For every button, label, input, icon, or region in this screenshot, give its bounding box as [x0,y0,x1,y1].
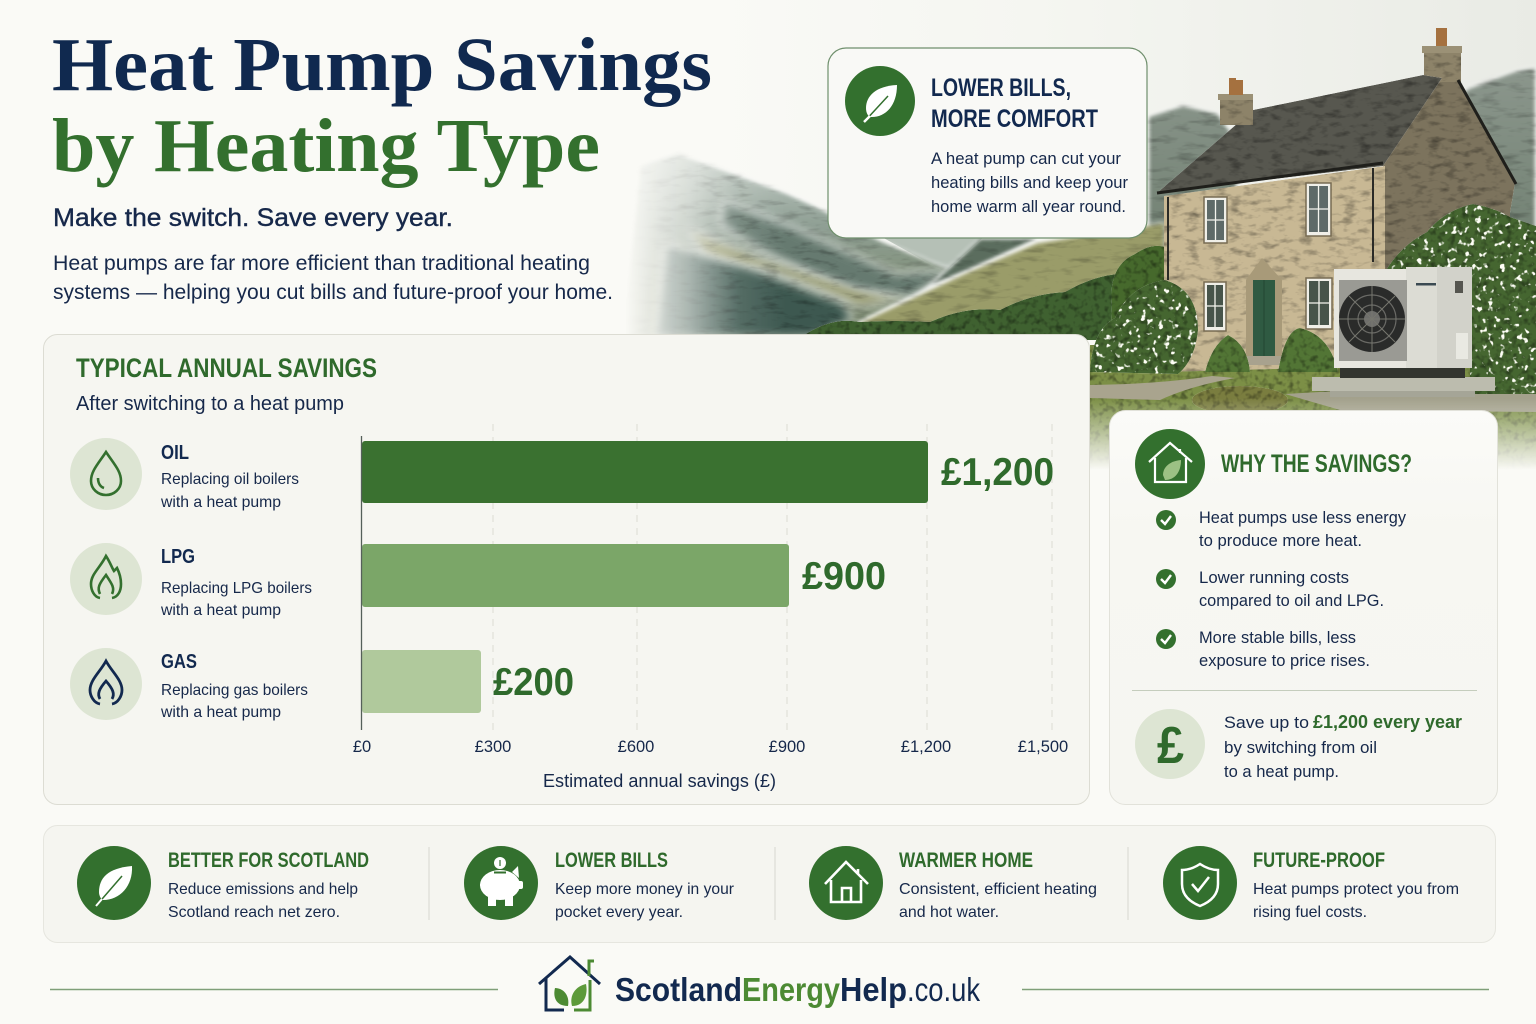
axis ticks: £900 [769,738,805,756]
intro paragraph: systems — helping you cut bills and future-proof your home. [53,280,613,304]
benefit: lower bills [464,846,735,921]
bar: gas [362,650,574,713]
footer logo [50,957,1489,1010]
row: oil: OIL [161,442,189,464]
benefit: warmer home: WARMER HOME [899,849,1033,872]
row: LPG: with a heat pump [160,602,281,619]
title line 2: by Heating Type [52,104,600,188]
axis ticks [353,738,1068,756]
right chimney [1422,28,1462,82]
gable wall [1383,78,1515,300]
door shrubs [1205,328,1338,372]
icon: house [809,846,883,920]
row: gas: GAS [161,651,197,673]
icon: shield [1163,846,1237,920]
reason 1 [1156,509,1407,550]
intro paragraph [53,251,613,304]
bar chart [353,424,1068,791]
callout heading: LOWER BILLS, [931,74,1071,102]
benefit: better for Scotland: Reduce emissions and help [168,881,358,898]
fan [1339,286,1405,352]
axis ticks: £1,500 [1018,738,1068,756]
mountain scenery [620,67,1536,340]
reason 2: compared to oil and LPG. [1199,592,1384,610]
casing [1334,269,1406,368]
scene: Scottish landscape with stone house and heat pump [620,0,1536,470]
right flowering bush [1385,204,1536,394]
bar: gas: £200 [493,661,574,704]
roof [1157,75,1442,193]
axis ticks: £600 [618,738,654,756]
icon: oil drop [91,452,121,495]
axis ticks: £300 [475,738,511,756]
stone house [1157,28,1516,372]
icon: house with leaves [539,957,600,1010]
left flowering bush [1090,280,1198,374]
panel subheading: After switching to a heat pump [76,393,344,415]
axis ticks: £1,200 [901,738,951,756]
windows [1204,183,1332,331]
benefit: future-proof [1163,846,1459,921]
benefit: future-proof: FUTURE-PROOF [1253,849,1385,872]
reason 1: Heat pumps use less energy [1199,509,1407,527]
panel heading: TYPICAL ANNUAL SAVINGS [76,353,377,383]
callout body [931,149,1128,216]
savings highlight: to a heat pump. [1224,762,1339,781]
row: oil: Replacing oil boilers [161,471,299,488]
benefit: better for Scotland [77,846,369,921]
benefit: better for Scotland: Scotland reach net zero. [168,904,340,921]
panel heading: WHY THE SAVINGS? [1221,450,1412,478]
logo wordmark: Help [840,971,907,1008]
row: gas: Replacing gas boilers [161,682,308,699]
reason 2 [1156,569,1384,610]
bar: LPG [362,544,886,607]
bar: oil [362,441,1054,503]
concrete base [1312,377,1495,391]
benefit: warmer home: and hot water. [899,904,999,921]
icon: LPG flame [91,556,121,598]
benefit: warmer home: Consistent, efficient heating [899,881,1097,898]
panel: benefits strip [44,826,1496,942]
callout body: A heat pump can cut your [931,149,1121,168]
row: gas [70,648,308,721]
callout body: heating bills and keep your [931,173,1128,192]
savings highlight: £1,200 every year [1313,712,1462,732]
benefit: future-proof: rising fuel costs. [1253,904,1367,921]
benefit: warmer home [809,846,1097,921]
green door [1246,258,1282,365]
panel: why the savings [1110,410,1498,804]
title [52,23,712,188]
savings highlight [1135,709,1462,781]
icon: leaf [845,66,915,136]
benefit: lower bills: LOWER BILLS [555,849,668,872]
tree behind house [1110,246,1175,340]
callout heading [931,74,1098,133]
row: gas: with a heat pump [160,704,281,721]
callout body: home warm all year round. [931,197,1126,216]
axis label: Estimated annual savings (£) [543,771,776,791]
savings highlight: by switching from oil [1224,738,1377,757]
savings highlight: £ [1157,717,1184,775]
logo wordmark: Scotland [615,971,742,1008]
logo wordmark: .co.uk [907,971,980,1008]
subtitle: Make the switch. Save every year. [53,204,453,232]
benefit: lower bills: Keep more money in your [555,881,735,898]
reason 3: exposure to price rises. [1199,652,1370,670]
sky [700,0,1536,340]
benefit: future-proof: Heat pumps protect you from [1253,881,1459,898]
left chimney [1218,78,1253,125]
row: oil [70,438,299,511]
row: LPG: LPG [161,546,195,568]
benefit: lower bills: pocket every year. [555,904,683,921]
icon: house with leaf [1135,429,1205,499]
savings highlight: Save up to [1224,713,1309,732]
front wall [1164,166,1385,372]
icon: leaf [77,846,151,920]
bar: LPG: £900 [802,555,886,598]
axis ticks: £0 [353,738,371,756]
ground and garden [1090,345,1536,470]
drainpipes [1168,168,1373,280]
heat pump unit [1312,267,1495,397]
icon: gas flame [90,661,122,704]
title line 1: Heat Pump Savings [52,23,712,107]
reason 1: to produce more heat. [1199,532,1362,550]
intro paragraph: Heat pumps are far more efficient than traditional heating [53,251,590,275]
bar: oil: £1,200 [941,451,1054,494]
reason 3: More stable bills, less [1199,629,1356,647]
grille panel [1339,280,1407,361]
reason 2: Lower running costs [1199,569,1349,587]
row: oil: with a heat pump [160,494,281,511]
logo wordmark: Energy [742,971,841,1008]
panel: typical annual savings [44,334,1090,804]
scene fade at bottom [1089,398,1536,470]
row: LPG [70,543,312,619]
reason 3 [1156,629,1370,670]
row: LPG: Replacing LPG boilers [161,580,312,597]
callout: lower bills, more comfort [828,48,1147,238]
benefit: better for Scotland: BETTER FOR SCOTLAND [168,849,369,872]
callout heading: MORE COMFORT [931,105,1098,133]
logo wordmark [615,971,980,1008]
icon: piggy bank [464,846,538,920]
